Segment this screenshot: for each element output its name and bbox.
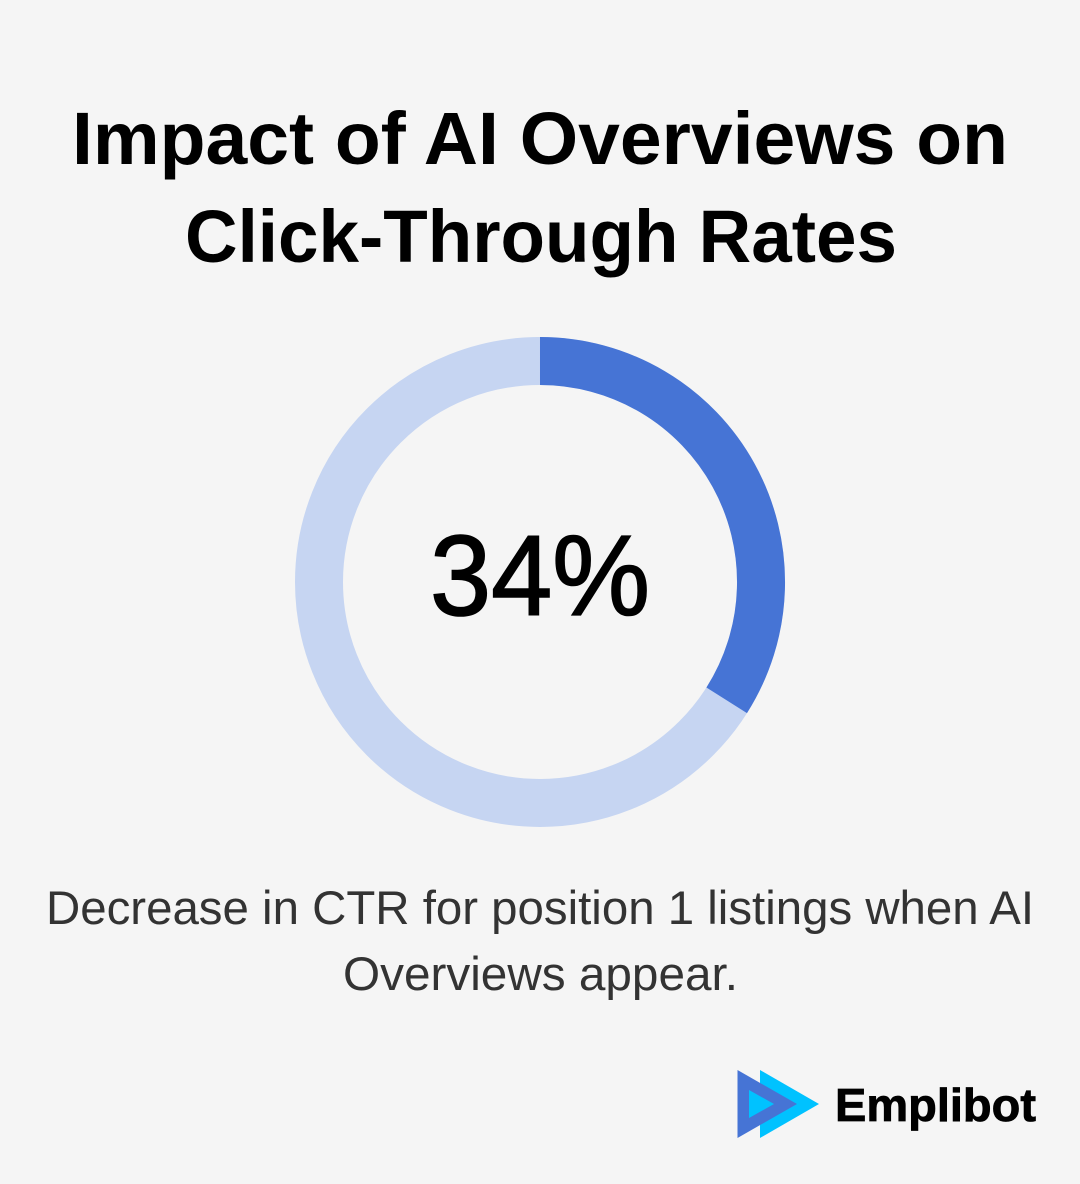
title: Impact of AI Overviews on	[72, 97, 1008, 180]
donut chart: 34%	[319, 361, 761, 803]
logo: Emplibot	[738, 1070, 1036, 1138]
title: Click-Through Rates	[185, 195, 897, 278]
description: Decrease in CTR for position 1 listings when AI	[46, 881, 1034, 934]
description	[46, 881, 1034, 1000]
icon: play triangles	[738, 1070, 819, 1138]
center value: 34%	[430, 513, 650, 640]
description: Overviews appear.	[343, 947, 738, 1000]
wordmark: Emplibot	[835, 1079, 1036, 1131]
title	[72, 97, 1008, 278]
